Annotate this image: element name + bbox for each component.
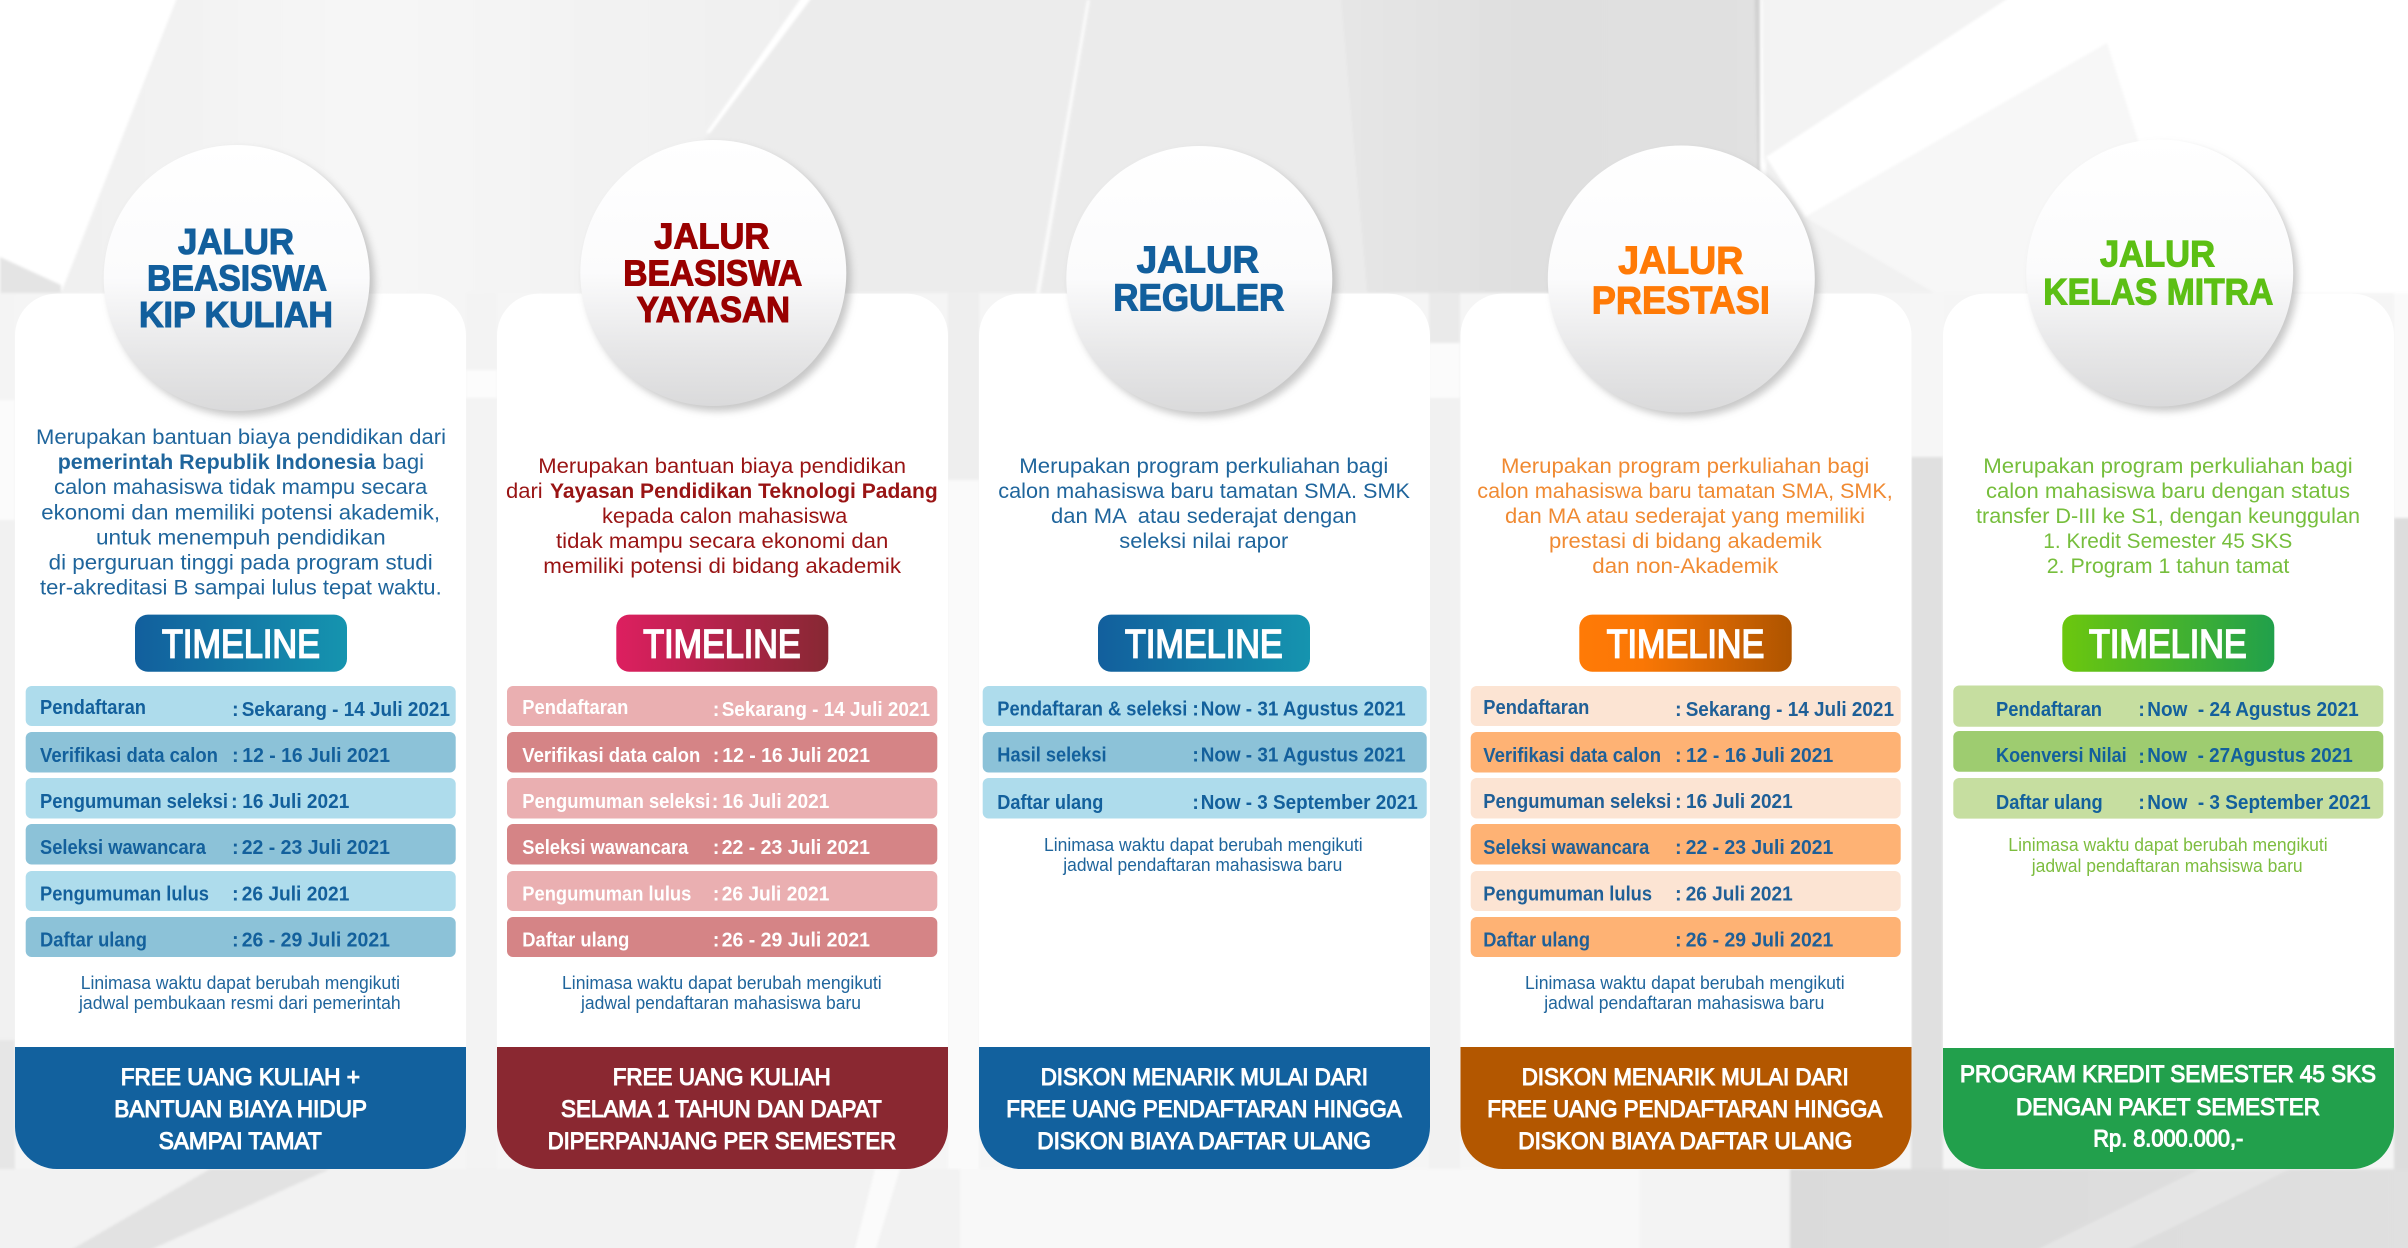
timeline table: :: [713, 930, 719, 952]
heading circle: PRESTASI: [1592, 279, 1770, 322]
footer benefit: SAMPAI TAMAT: [159, 1128, 322, 1155]
footer benefit: Rp. 8.000.000,-: [2093, 1126, 2243, 1153]
heading circle: BEASISWA: [623, 252, 802, 293]
timeline table: :: [232, 837, 239, 859]
timeline badge: TIMELINE: [162, 622, 320, 666]
timeline table: 26 - 29 Juli 2021: [1686, 930, 1833, 952]
panel: jalur beasiswa yayasan: [497, 140, 948, 1169]
timeline table: :: [1192, 745, 1199, 767]
timeline table: :: [713, 699, 719, 721]
heading circle: [1066, 146, 1337, 417]
timeline table: 22 - 23 Juli 2021: [722, 837, 870, 859]
heading circle: JALUR: [1618, 239, 1743, 282]
description: [36, 425, 446, 600]
timeline table: 12 - 16 Juli 2021: [722, 745, 870, 767]
timeline table: Verifikasi data calon: [522, 745, 700, 767]
timeline table: :: [1675, 745, 1682, 767]
timeline table: Now - 3 September 2021: [1201, 792, 1418, 814]
footer benefit: FREE UANG KULIAH +: [121, 1064, 360, 1091]
timeline note: [2008, 834, 2328, 876]
footer benefit: [1943, 1048, 2394, 1169]
description: untuk menempuh pendidikan: [96, 526, 386, 550]
description: 1. Kredit Semester 45 SKS: [2043, 529, 2292, 553]
timeline table: [1953, 686, 2383, 819]
timeline table: :: [2138, 792, 2145, 814]
heading circle: [1548, 146, 1819, 417]
timeline table: :: [2138, 746, 2145, 768]
timeline note: Linimasa waktu dapat berubah mengikuti: [1525, 972, 1845, 993]
description: transfer D-III ke S1, dengan keunggulan: [1976, 504, 2360, 528]
description: [998, 454, 1411, 553]
timeline table: Pendaftaran: [1996, 699, 2102, 721]
heading circle: BEASISWA: [147, 258, 327, 299]
panel: jalur reguler: [979, 146, 1430, 1169]
timeline note: Linimasa waktu dapat berubah mengikuti: [1044, 834, 1363, 855]
timeline table: :: [1675, 884, 1682, 906]
description: tidak mampu secara ekonomi dan: [556, 529, 888, 553]
timeline table: Now - 31 Agustus 2021: [1201, 699, 1406, 721]
description: Merupakan program perkuliahan bagi: [1019, 454, 1388, 478]
heading circle: KELAS MITRA: [2043, 272, 2273, 313]
timeline table: [507, 686, 937, 957]
footer benefit: [497, 1047, 948, 1169]
footer benefit: SELAMA 1 TAHUN DAN DAPAT: [561, 1096, 882, 1123]
timeline table: Pengumuman lulus: [1483, 884, 1652, 906]
description: memiliki potensi di bidang akademik: [543, 554, 901, 578]
footer benefit: DIPERPANJANG PER SEMESTER: [548, 1128, 896, 1155]
timeline table: 16 Juli 2021: [722, 791, 829, 813]
description: calon mahasiswa tidak mampu secara: [54, 475, 427, 499]
footer benefit: FREE UANG KULIAH: [613, 1064, 831, 1091]
timeline table: Koenversi Nilai: [1996, 745, 2127, 767]
timeline table: Now - 31 Agustus 2021: [1201, 745, 1406, 767]
timeline table: Now - 24 Agustus 2021: [2147, 699, 2359, 721]
description: prestasi di bidang akademik: [1549, 529, 1822, 553]
description: dari: [506, 479, 543, 503]
description: Merupakan program perkuliahan bagi: [1501, 454, 1869, 478]
timeline badge: [616, 615, 828, 672]
description: 2. Program 1 tahun tamat: [2047, 554, 2289, 578]
description: Merupakan bantuan biaya pendidikan dari: [36, 425, 446, 449]
timeline table: :: [713, 837, 719, 859]
description: [1477, 454, 1893, 578]
timeline table: :: [232, 745, 239, 767]
footer benefit: FREE UANG PENDAFTARAN HINGGA: [1006, 1096, 1402, 1123]
timeline badge: TIMELINE: [1125, 622, 1283, 666]
timeline table: 12 - 16 Juli 2021: [1686, 745, 1833, 767]
timeline table: :: [232, 884, 239, 906]
footer benefit: DISKON MENARIK MULAI DARI: [1041, 1064, 1368, 1091]
heading circle: YAYASAN: [637, 289, 790, 330]
timeline note: jadwal pendaftaran mahasiswa baru: [580, 992, 861, 1013]
description: Merupakan bantuan biaya pendidikan: [538, 454, 906, 478]
timeline table: :: [2138, 699, 2145, 721]
card body: [979, 294, 1430, 1169]
timeline badge: [1098, 615, 1310, 672]
timeline table: 26 Juli 2021: [722, 884, 829, 906]
description: di perguruan tinggi pada program studi: [49, 550, 433, 574]
timeline table: 26 - 29 Juli 2021: [242, 930, 390, 952]
timeline table: Seleksi wawancara: [522, 837, 689, 859]
footer benefit: PROGRAM KREDIT SEMESTER 45 SKS: [1960, 1061, 2376, 1088]
timeline table: :: [712, 791, 718, 813]
footer benefit: DISKON BIAYA DAFTAR ULANG: [1518, 1128, 1852, 1155]
heading circle: [2026, 140, 2298, 411]
timeline table: Pengumuman seleksi: [40, 791, 228, 813]
timeline table: :: [713, 745, 719, 767]
timeline table: :: [1192, 792, 1199, 814]
timeline table: Pendaftaran & seleksi: [997, 699, 1187, 721]
heading circle: JALUR: [2100, 233, 2215, 274]
heading circle: KIP KULIAH: [139, 294, 333, 335]
footer benefit: [979, 1047, 1430, 1169]
timeline table: [983, 686, 1427, 818]
footer benefit: DISKON MENARIK MULAI DARI: [1522, 1064, 1849, 1091]
footer benefit: DENGAN PAKET SEMESTER: [2016, 1094, 2320, 1121]
timeline table: 26 Juli 2021: [242, 884, 349, 906]
timeline table: 12 - 16 Juli 2021: [242, 745, 390, 767]
timeline badge: TIMELINE: [2089, 622, 2247, 666]
timeline table: Daftar ulang: [997, 792, 1103, 814]
timeline table: Daftar ulang: [1996, 792, 2103, 814]
heading circle: [580, 140, 851, 411]
heading circle: JALUR: [654, 216, 769, 257]
timeline table: 26 - 29 Juli 2021: [722, 930, 870, 952]
description: [506, 454, 938, 578]
panel: jalur kelas mitra: [1943, 140, 2394, 1169]
description: seleksi nilai rapor: [1119, 529, 1288, 553]
timeline note: jadwal pendaftaran mahsiswa baru: [2031, 855, 2303, 876]
timeline table: Now - 3 September 2021: [2147, 792, 2371, 814]
timeline table: Pengumuman lulus: [40, 884, 209, 906]
timeline table: Verifikasi data calon: [1483, 745, 1661, 767]
description: dan MA atau sederajat yang memiliki: [1505, 504, 1865, 528]
timeline note: [1525, 972, 1845, 1013]
description: calon mahasiswa baru tamatan SMA. SMK: [998, 479, 1411, 503]
description: dan MA atau sederajat dengan: [1051, 504, 1357, 528]
timeline table: Pengumuman seleksi: [522, 791, 710, 813]
description: [1976, 454, 2360, 578]
card body: [497, 294, 948, 1169]
timeline table: 22 - 23 Juli 2021: [1686, 837, 1833, 859]
card body: [15, 294, 466, 1169]
description: Merupakan program perkuliahan bagi: [1983, 454, 2353, 478]
timeline table: :: [1675, 699, 1682, 721]
description: kepada calon mahasiswa: [602, 504, 847, 528]
footer benefit: [15, 1047, 466, 1169]
timeline table: 22 - 23 Juli 2021: [242, 837, 390, 859]
timeline table: Pendaftaran: [1483, 697, 1589, 719]
footer benefit: FREE UANG PENDAFTARAN HINGGA: [1487, 1096, 1882, 1123]
description: ekonomi dan memiliki potensi akademik,: [41, 500, 440, 524]
timeline note: Linimasa waktu dapat berubah mengikuti: [81, 972, 400, 993]
timeline note: [78, 972, 401, 1013]
timeline note: Linimasa waktu dapat berubah mengikuti: [2008, 834, 2328, 855]
timeline table: Verifikasi data calon: [40, 745, 218, 767]
timeline note: jadwal pendaftaran mahasiswa baru: [1543, 992, 1824, 1013]
timeline table: :: [1675, 791, 1682, 813]
heading circle: JALUR: [178, 221, 294, 262]
timeline badge: TIMELINE: [1607, 622, 1764, 666]
timeline table: Seleksi wawancara: [1483, 837, 1650, 859]
description: bagi: [382, 450, 424, 474]
timeline table: Pengumuman lulus: [522, 884, 691, 906]
timeline table: [26, 686, 456, 957]
timeline table: :: [1675, 930, 1682, 952]
timeline table: :: [232, 930, 239, 952]
timeline table: :: [232, 699, 239, 721]
description: calon mahasiswa baru dengan status: [1986, 479, 2350, 503]
timeline table: Daftar ulang: [522, 930, 629, 952]
footer benefit: [1460, 1047, 1912, 1169]
timeline table: :: [231, 791, 238, 813]
timeline table: :: [1192, 699, 1199, 721]
timeline badge: [2062, 615, 2274, 672]
timeline badge: TIMELINE: [643, 622, 801, 666]
timeline table: Sekarang - 14 Juli 2021: [1686, 699, 1894, 721]
timeline table: Hasil seleksi: [997, 745, 1107, 767]
description: dan non-Akademik: [1592, 554, 1779, 578]
description: calon mahasiswa baru tamatan SMA, SMK,: [1477, 479, 1893, 503]
description: ter-akreditasi B sampai lulus tepat waktu.: [40, 576, 442, 600]
panel: jalur prestasi: [1460, 146, 1912, 1169]
timeline table: 26 Juli 2021: [1686, 884, 1793, 906]
heading circle: [104, 145, 374, 416]
footer benefit: BANTUAN BIAYA HIDUP: [114, 1096, 367, 1123]
description: Yayasan Pendidikan Teknologi Padang: [550, 479, 938, 503]
footer benefit: DISKON BIAYA DAFTAR ULANG: [1037, 1128, 1371, 1155]
timeline badge: [1579, 615, 1792, 672]
timeline table: Daftar ulang: [1483, 930, 1590, 952]
heading circle: REGULER: [1113, 278, 1284, 320]
timeline table: Pengumuman seleksi: [1483, 791, 1671, 813]
timeline table: :: [713, 884, 719, 906]
card body: [1460, 294, 1912, 1169]
timeline note: [562, 972, 882, 1013]
timeline table: Sekarang - 14 Juli 2021: [722, 699, 930, 721]
timeline table: [1471, 686, 1901, 957]
timeline table: :: [1675, 837, 1682, 859]
timeline note: [1044, 834, 1363, 875]
heading circle: JALUR: [1137, 240, 1259, 282]
timeline table: 16 Juli 2021: [242, 791, 349, 813]
timeline note: Linimasa waktu dapat berubah mengikuti: [562, 972, 882, 993]
panel: jalur beasiswa KIP kuliah: [15, 145, 466, 1169]
timeline table: Now - 27Agustus 2021: [2147, 745, 2353, 767]
timeline table: Daftar ulang: [40, 930, 147, 952]
description: pemerintah Republik Indonesia: [58, 450, 377, 474]
timeline badge: [135, 615, 347, 672]
timeline note: jadwal pendaftaran mahasiswa baru: [1062, 854, 1342, 875]
card body: [1943, 294, 2394, 1169]
timeline table: Pendaftaran: [522, 697, 628, 719]
timeline table: Pendaftaran: [40, 697, 146, 719]
timeline note: jadwal pembukaan resmi dari pemerintah: [78, 992, 401, 1013]
timeline table: Sekarang - 14 Juli 2021: [242, 699, 450, 721]
timeline table: Seleksi wawancara: [40, 837, 207, 859]
timeline table: 16 Juli 2021: [1686, 791, 1793, 813]
